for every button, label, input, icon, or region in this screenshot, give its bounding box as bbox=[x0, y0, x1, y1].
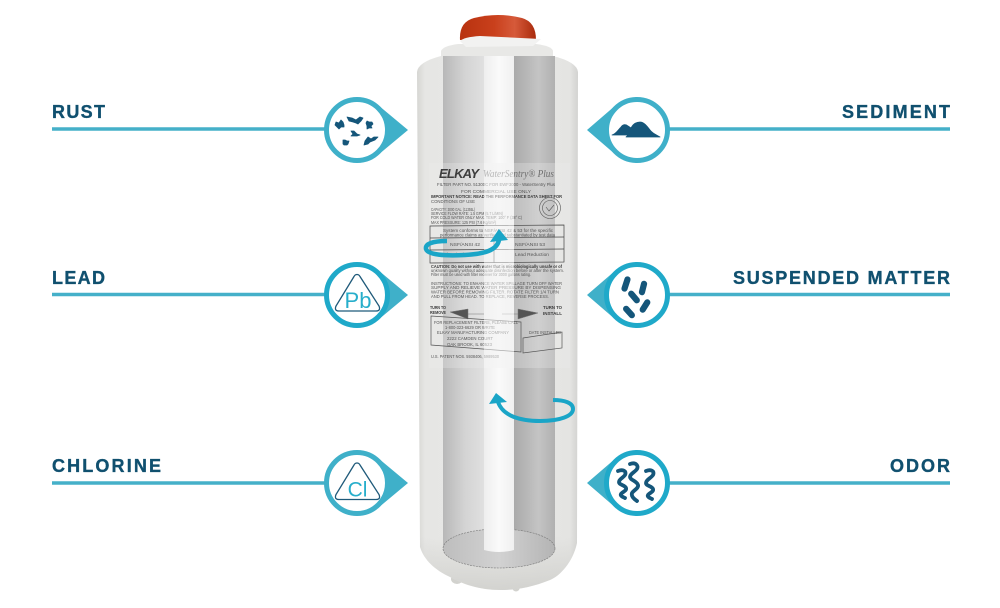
heading: sediment: SEDIMENT bbox=[842, 102, 950, 122]
replacement information box: ELKAY MANUFACTURING COMPANY bbox=[437, 330, 509, 335]
caution text: CAUTION: Do not use with water that is microbiologically unsafe or of bbox=[431, 264, 562, 269]
brand name: ELKAY bbox=[439, 166, 480, 181]
replacement information box: 1-800-323-6629 OR WRITE bbox=[445, 325, 495, 330]
rule bbox=[52, 481, 326, 485]
inner media left bbox=[443, 56, 484, 548]
instructions text: SUPPLY AND RELIEVE WATER PRESSURE BY DISPENSING bbox=[431, 285, 561, 290]
pointer bbox=[587, 105, 616, 155]
replacement information box: FOR REPLACEMENT FILTERS, PLEASE CALL bbox=[434, 320, 518, 325]
icon: suspended particles bbox=[621, 276, 651, 319]
instructions text: WATER BEFORE REMOVING FILTER. ROTATE FILTER 1/4 TURN bbox=[431, 290, 559, 294]
specifications: CAPACITY: 3000 GAL. (11355L) bbox=[431, 207, 475, 212]
callout: lead bbox=[52, 264, 408, 326]
certification table bbox=[430, 225, 564, 263]
heading: chlorine: CHLORINE bbox=[52, 456, 161, 476]
upper rotation arrow bbox=[426, 229, 508, 255]
certification table: Chemical Taste bbox=[443, 252, 477, 257]
turn to remove: TURN TO bbox=[430, 305, 446, 310]
centre tube bbox=[484, 56, 514, 552]
pointer bbox=[587, 458, 616, 508]
patent numbers: U.S. PATENT NOS. 5938406, 5989530 bbox=[431, 354, 499, 359]
specifications: FOR COLD WATER ONLY MAX. TEMP: 100° F (38° C) bbox=[431, 215, 522, 220]
tube sheen over label bbox=[484, 163, 514, 368]
rule bbox=[668, 127, 950, 131]
filter feet bbox=[451, 574, 520, 592]
heading: rust: RUST bbox=[52, 102, 105, 122]
instructions text: AND PULL FROM HEAD. TO REPLACE, REVERSE PROCESS. bbox=[431, 294, 549, 299]
certification table: Lead Reduction bbox=[515, 252, 549, 257]
part number and notice bbox=[431, 182, 563, 204]
callout: chlorine bbox=[52, 452, 408, 514]
heading: lead: LEAD bbox=[52, 268, 105, 288]
label backing bbox=[429, 163, 570, 368]
date installed box: DATE INSTALLED bbox=[529, 330, 562, 335]
product label bbox=[429, 163, 570, 368]
turn to install bbox=[502, 305, 562, 319]
icon: sediment mounds bbox=[612, 122, 660, 137]
pointer bbox=[378, 270, 408, 320]
callout: suspended matter bbox=[587, 264, 950, 326]
filter bottom rim shading bbox=[417, 56, 578, 590]
caution text: Filter must be used with filter receiver for 3000 gallons rating. bbox=[431, 272, 531, 277]
ring bbox=[326, 100, 388, 160]
icon: chlorine symbol bbox=[335, 463, 380, 502]
certification table: NSF/ANSI 42 bbox=[450, 242, 480, 247]
caution text bbox=[431, 264, 564, 277]
replacement information box: OAK BROOK, IL 60523 bbox=[447, 342, 492, 347]
pointer bbox=[587, 270, 616, 320]
callout: rust bbox=[52, 100, 408, 160]
heading: odor: ODOR bbox=[890, 456, 950, 476]
certification seal bbox=[540, 198, 560, 218]
replacement information box bbox=[431, 316, 521, 352]
specifications bbox=[431, 207, 522, 225]
certification table: System conforms to NSF/ANSI 42 & 53 for the specific bbox=[443, 228, 554, 233]
filter cartridge bbox=[417, 15, 578, 592]
callout: sediment bbox=[587, 100, 950, 160]
collar ledge bbox=[460, 36, 541, 47]
instructions text: INSTRUCTIONS: TO ENHANCE WATER SPILLAGE TURN OFF WATER bbox=[431, 281, 563, 286]
part number and notice: FOR COMMERCIAL USE ONLY bbox=[461, 189, 531, 194]
icon: rust particles bbox=[335, 117, 378, 145]
part number and notice: CONDITIONS OF USE bbox=[431, 199, 475, 204]
callout: odor bbox=[587, 452, 950, 514]
inner media right bbox=[514, 56, 555, 548]
part number and notice: IMPORTANT NOTICE: READ THE PERFORMANCE DATA SHEET FOR bbox=[431, 194, 563, 199]
turn to install: INSTALL bbox=[543, 311, 562, 316]
lower rotation arrow bbox=[489, 393, 573, 421]
part number and notice: FILTER PART NO. 51300C FOR EWF3000 - WaterSentry Plus bbox=[437, 182, 556, 187]
icon: chlorine symbol: Cl bbox=[348, 478, 367, 502]
filter neck collar bbox=[441, 44, 553, 58]
ring bbox=[606, 264, 668, 326]
date installed box bbox=[523, 330, 562, 353]
ring bbox=[326, 452, 388, 514]
canister floor ellipse bbox=[443, 529, 555, 568]
turn to remove bbox=[430, 305, 484, 319]
ring bbox=[606, 452, 668, 514]
filter body bbox=[417, 56, 578, 590]
ring bbox=[606, 100, 668, 160]
certification table: NSF/ANSI 53 bbox=[515, 242, 545, 247]
heading: suspended matter: SUSPENDED MATTER bbox=[733, 268, 950, 288]
instructions text bbox=[431, 281, 563, 299]
rule bbox=[52, 127, 326, 131]
replacement information box: 2222 CAMDEN COURT bbox=[447, 336, 493, 341]
ring bbox=[326, 264, 388, 326]
turn to remove: REMOVE bbox=[430, 310, 446, 315]
red cap bbox=[460, 15, 536, 40]
pointer bbox=[378, 105, 408, 155]
specifications: SERVICE FLOW RATE: 1.5 GPM (5.7 L/MIN) bbox=[431, 211, 503, 216]
rule bbox=[668, 481, 950, 485]
icon: odor waves bbox=[618, 463, 654, 501]
rule bbox=[52, 293, 326, 296]
rule bbox=[668, 293, 950, 296]
certification table: performance claims as verified and substantiated by test data bbox=[440, 232, 555, 238]
product name: WaterSentry® Plus bbox=[483, 169, 554, 180]
specifications: MAX PRESSURE: 125 PSI (7.6 Kg/cm²) bbox=[431, 220, 496, 225]
caution text: unknown quality without adequate disinfection before or after the system. bbox=[431, 268, 564, 273]
icon: lead symbol: Pb bbox=[345, 288, 371, 313]
pointer bbox=[378, 458, 408, 508]
icon: lead symbol bbox=[335, 274, 380, 313]
turn to install: TURN TO bbox=[543, 305, 562, 310]
